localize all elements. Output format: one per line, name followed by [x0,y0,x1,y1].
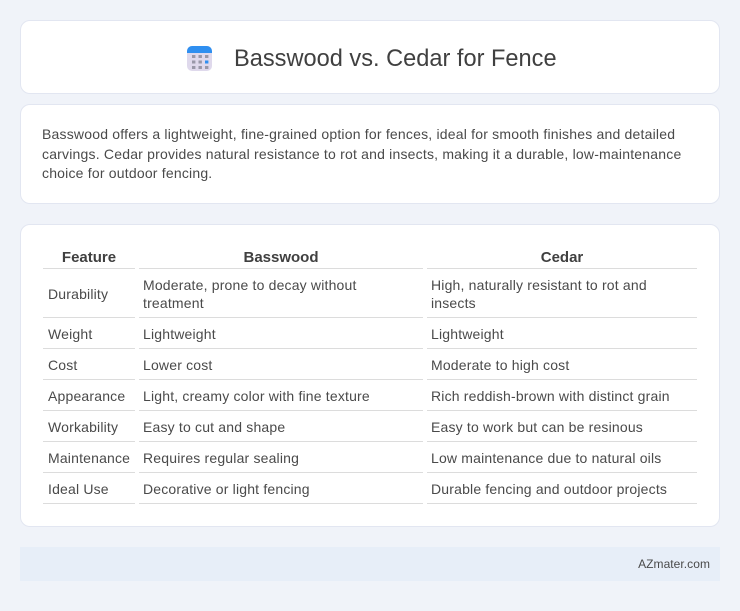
panel: title card [20,20,720,94]
table: comparison: Ideal Use [48,481,109,497]
table: comparison: Low maintenance due to natural oils [431,450,661,466]
row: ideal use [43,481,697,504]
table: comparison: Lightweight [431,326,504,342]
row: weight [43,326,697,349]
footer bar [20,547,720,581]
row: appearance [43,388,697,411]
row: workability [43,419,697,442]
table: comparison: Durable fencing and outdoor projects [431,481,667,497]
table: comparison: Lightweight [143,326,216,342]
text block: description: Basswood offers a lightweight, fine-grained option for fences, ideal for smooth finishes and detailed [42,126,675,142]
table: comparison: Light, creamy color with fine texture [143,388,370,404]
table: comparison: Easy to work but can be resinous [431,419,643,435]
table: comparison: Appearance [48,388,125,404]
text block: description: carvings. Cedar provides natural resistance to rot and insects, making it a durable, low-maintenance [42,146,681,162]
table: comparison: Durability [48,286,108,302]
table: comparison: Requires regular sealing [143,450,299,466]
row: cost [43,357,697,380]
table: comparison: Decorative or light fencing [143,481,310,497]
title: Basswood vs. Cedar for Fence [234,46,557,72]
table: comparison: Cost [48,357,78,373]
table: comparison: Cedar [541,249,583,266]
table header [43,249,697,269]
table: comparison: Feature [62,249,116,266]
table: comparison: Workability [48,419,118,435]
table: comparison: Easy to cut and shape [143,419,285,435]
table: comparison: Moderate, prone to decay without [143,277,357,293]
table: comparison: insects [431,295,476,311]
table: comparison: Rich reddish-brown with distinct grain [431,388,670,404]
table: comparison: Lower cost [143,357,212,373]
table: comparison: Basswood [243,249,318,266]
table: comparison [43,249,697,504]
text block: description: choice for outdoor fencing. [42,165,212,181]
text block: description [42,126,681,181]
icon: calendar [187,46,212,71]
table: comparison: treatment [143,295,204,311]
table: comparison: Moderate to high cost [431,357,569,373]
row: durability [43,277,697,318]
table: comparison: High, naturally resistant to rot and [431,277,647,293]
table: comparison: Weight [48,326,92,342]
footer text: AZmater.com [638,557,710,571]
row: maintenance [43,450,697,473]
table: comparison: Maintenance [48,450,130,466]
panel: description [20,104,720,204]
panel: comparison table [20,224,720,527]
